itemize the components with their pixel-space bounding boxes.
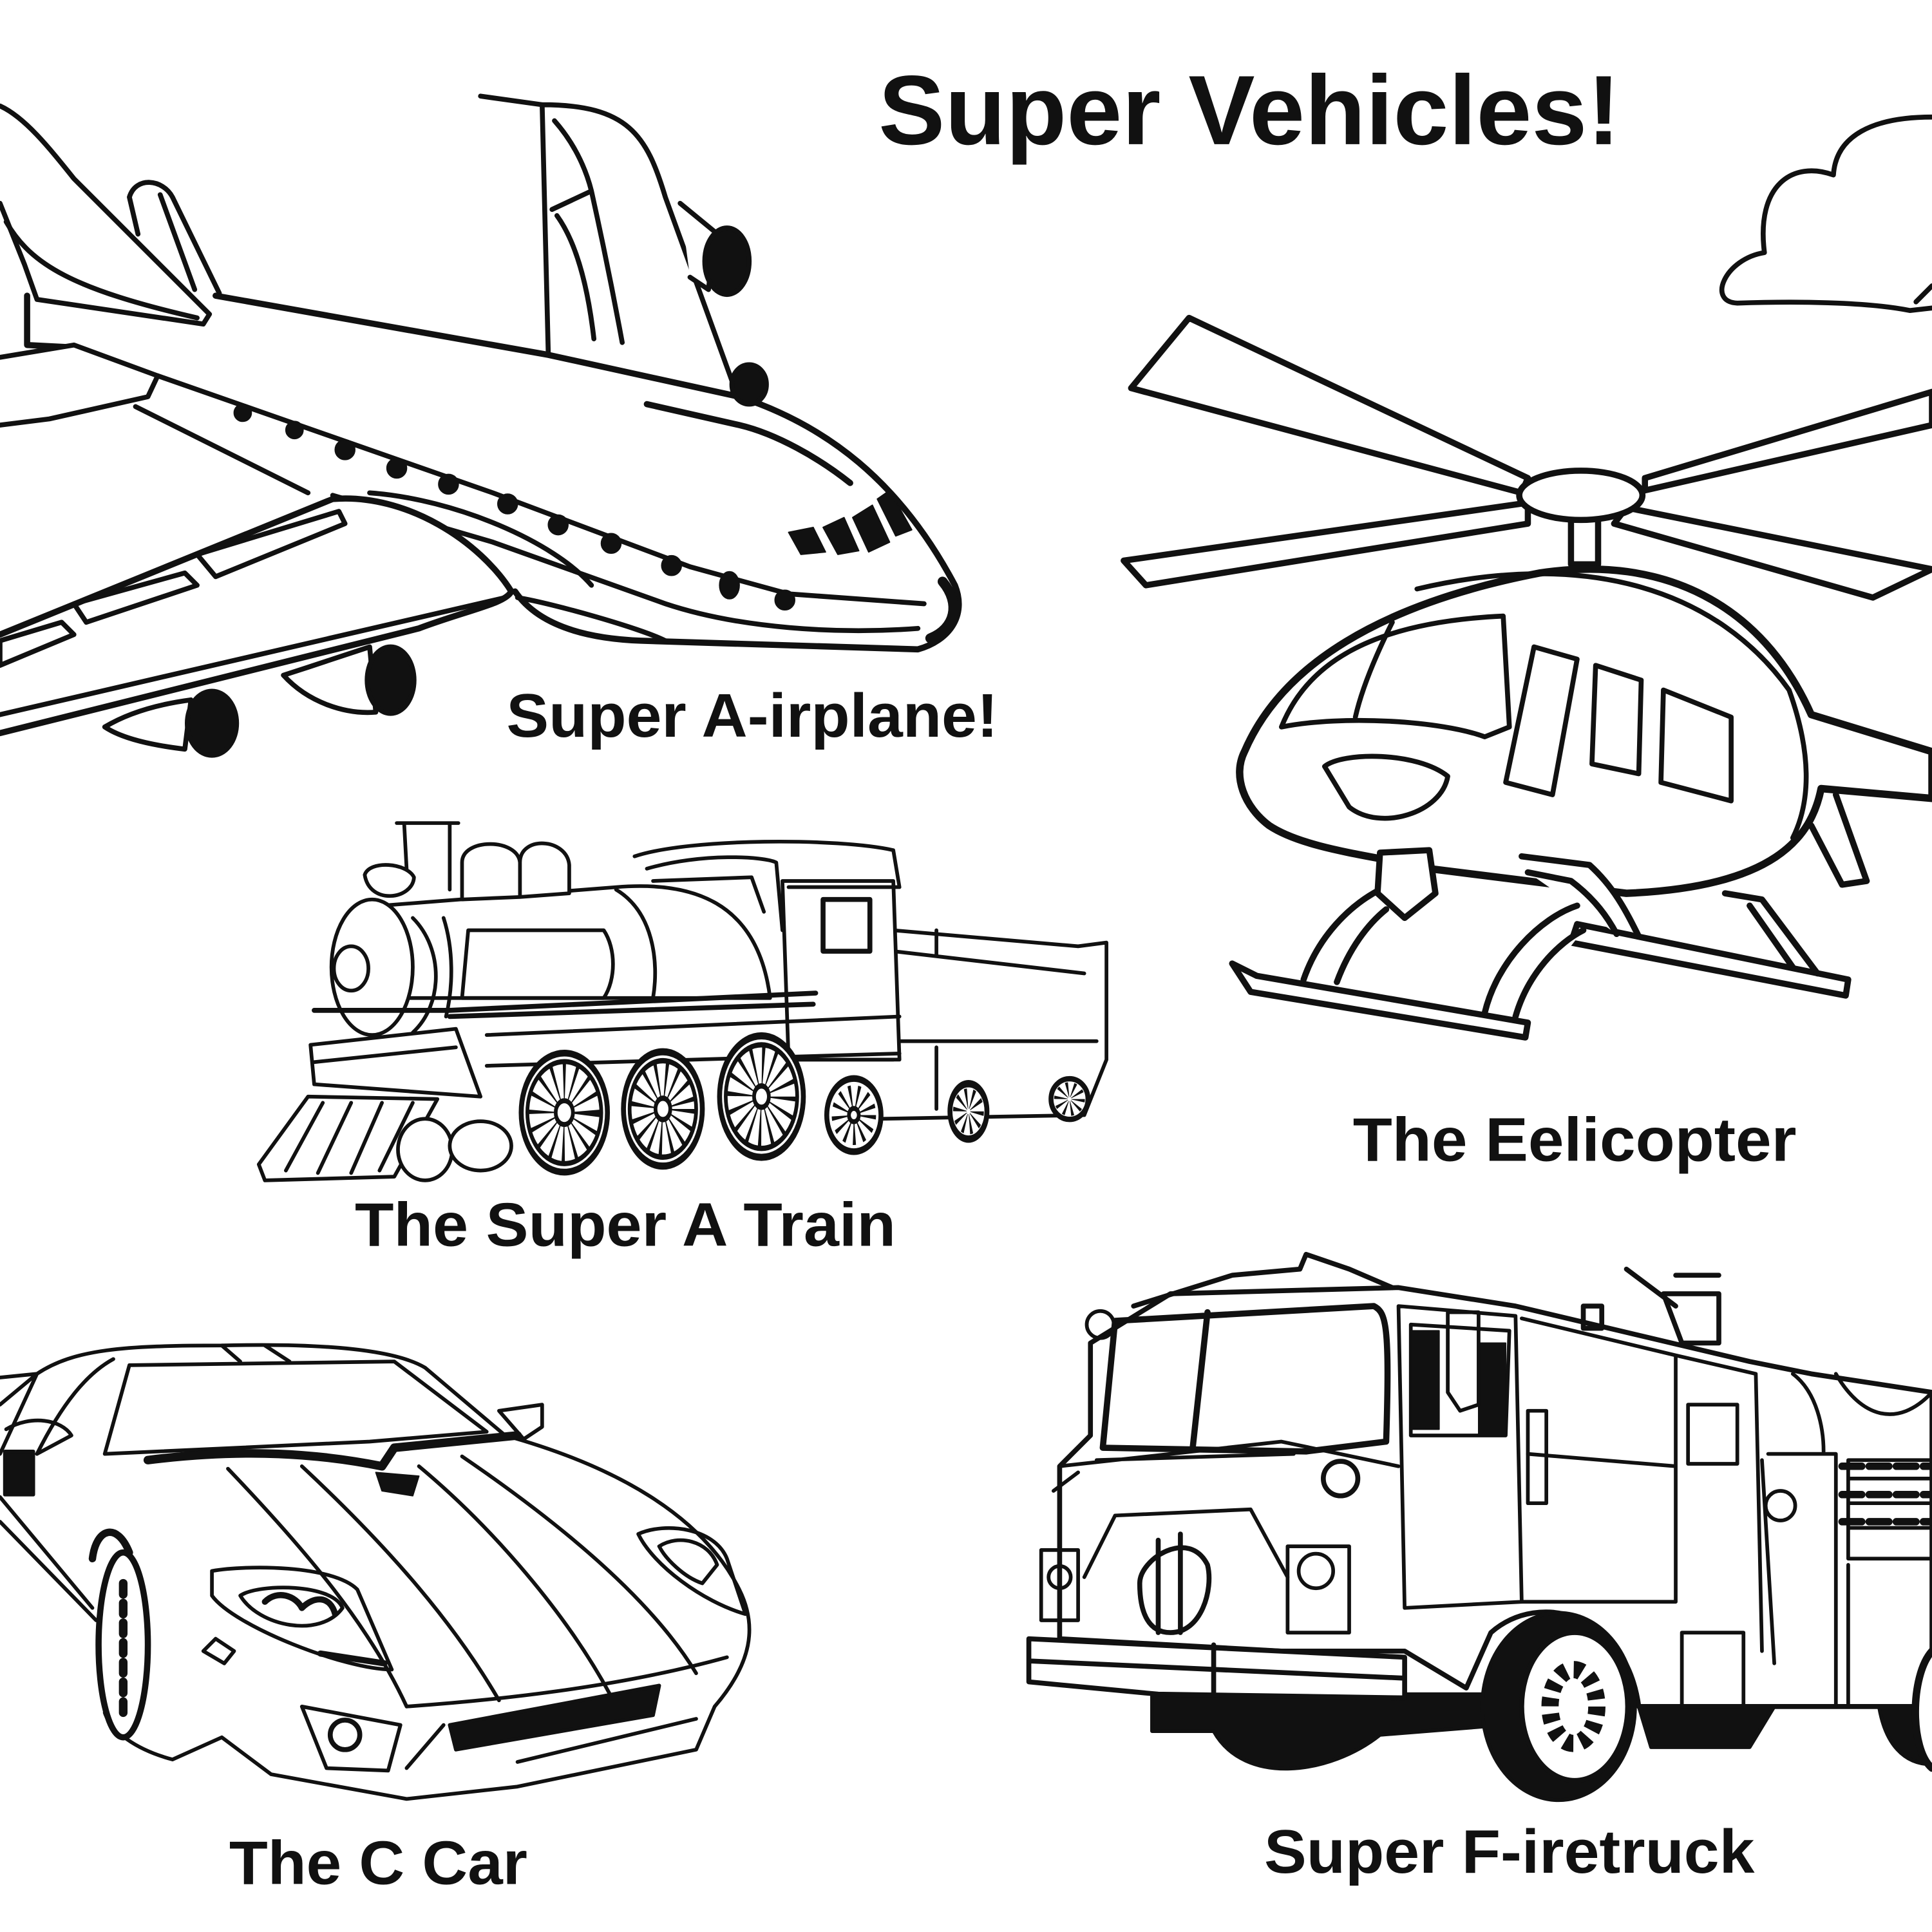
train cowcatcher xyxy=(259,1097,437,1180)
train cab xyxy=(634,842,900,1059)
firetruck rear wheel xyxy=(1915,1651,1932,1768)
icon: cloud xyxy=(1722,117,1932,310)
car mirrors xyxy=(499,1405,542,1439)
car racing stripes xyxy=(228,1456,727,1707)
train cab window xyxy=(823,900,870,951)
label: train: The Super A Train xyxy=(355,1190,896,1259)
airplane cockpit windows xyxy=(788,490,912,554)
helicopter illustration xyxy=(1124,318,1932,1037)
train running board and frame xyxy=(314,993,816,1016)
helicopter tail strut xyxy=(1811,795,1867,885)
firetruck body panels xyxy=(1522,1318,1848,1707)
helicopter lower window xyxy=(1325,756,1448,819)
train tender wheel one xyxy=(950,1084,987,1139)
firetruck headlights xyxy=(1041,1546,1349,1633)
firetruck windshield xyxy=(1103,1306,1388,1452)
car left headlight xyxy=(212,1567,392,1669)
helicopter strut mount xyxy=(1378,850,1435,918)
car lower intake xyxy=(204,1639,696,1770)
airplane fuselage xyxy=(27,296,959,649)
helicopter body xyxy=(1240,569,1932,893)
car right headlight xyxy=(638,1528,746,1614)
firetruck cab outline xyxy=(1059,1287,1932,1707)
train wheel one xyxy=(521,1053,607,1172)
train small leading wheels xyxy=(398,1119,452,1180)
firetruck bumper xyxy=(1029,1639,1405,1698)
airplane vertical tail xyxy=(480,96,737,394)
helicopter windows xyxy=(1506,647,1731,801)
label: airplane: Super A-irplane! xyxy=(506,681,998,750)
train tender xyxy=(881,931,1106,1119)
label: car: The C Car xyxy=(229,1828,527,1897)
train boiler xyxy=(382,886,770,998)
train trailing wheel xyxy=(827,1079,881,1151)
train wheel two xyxy=(623,1052,703,1166)
airplane nose xyxy=(931,582,953,638)
car wheel xyxy=(99,1553,148,1738)
car body outline xyxy=(0,1345,750,1799)
firetruck pump panel xyxy=(1793,1374,1932,1558)
airplane wing stub xyxy=(0,345,158,425)
train wheel three xyxy=(719,1036,803,1157)
airplane main wing xyxy=(0,498,511,733)
airplane wing engine right xyxy=(283,647,376,712)
firetruck wheels xyxy=(1152,1694,1932,1768)
helicopter rotor blades xyxy=(1124,318,1932,598)
firetruck illustration xyxy=(1029,1255,1932,1800)
airplane tail stabilizer xyxy=(0,106,209,324)
train domes and stack xyxy=(365,823,569,900)
firetruck roof equipment xyxy=(1133,1255,1719,1343)
train illustration xyxy=(259,823,1106,1180)
label: helicopter: The Eelicopter xyxy=(1353,1105,1797,1174)
train smokebox xyxy=(332,900,413,1035)
firetruck cab door xyxy=(1399,1306,1522,1608)
airplane side windows xyxy=(234,404,795,610)
car hood crease xyxy=(148,1435,518,1466)
airplane small fin xyxy=(6,182,220,318)
firetruck hood xyxy=(1054,1442,1399,1577)
train tender wheel two xyxy=(1051,1079,1088,1119)
helicopter skids xyxy=(1232,924,1848,1037)
airplane wing engine left xyxy=(105,700,191,749)
car grille xyxy=(450,1685,659,1750)
helicopter hub and mast xyxy=(1571,518,1598,564)
car windshield xyxy=(37,1345,487,1454)
label: firetruck: Super F-iretruck xyxy=(1264,1817,1755,1886)
firetruck front wheel xyxy=(1482,1613,1635,1800)
helicopter canopy xyxy=(1282,574,1806,838)
airplane illustration xyxy=(0,96,959,755)
title: Super Vehicles! xyxy=(878,55,1620,166)
firetruck grille emblem xyxy=(1140,1534,1209,1633)
airplane window strip xyxy=(135,376,924,630)
car illustration xyxy=(0,1345,750,1799)
airplane tail engine xyxy=(680,204,715,290)
